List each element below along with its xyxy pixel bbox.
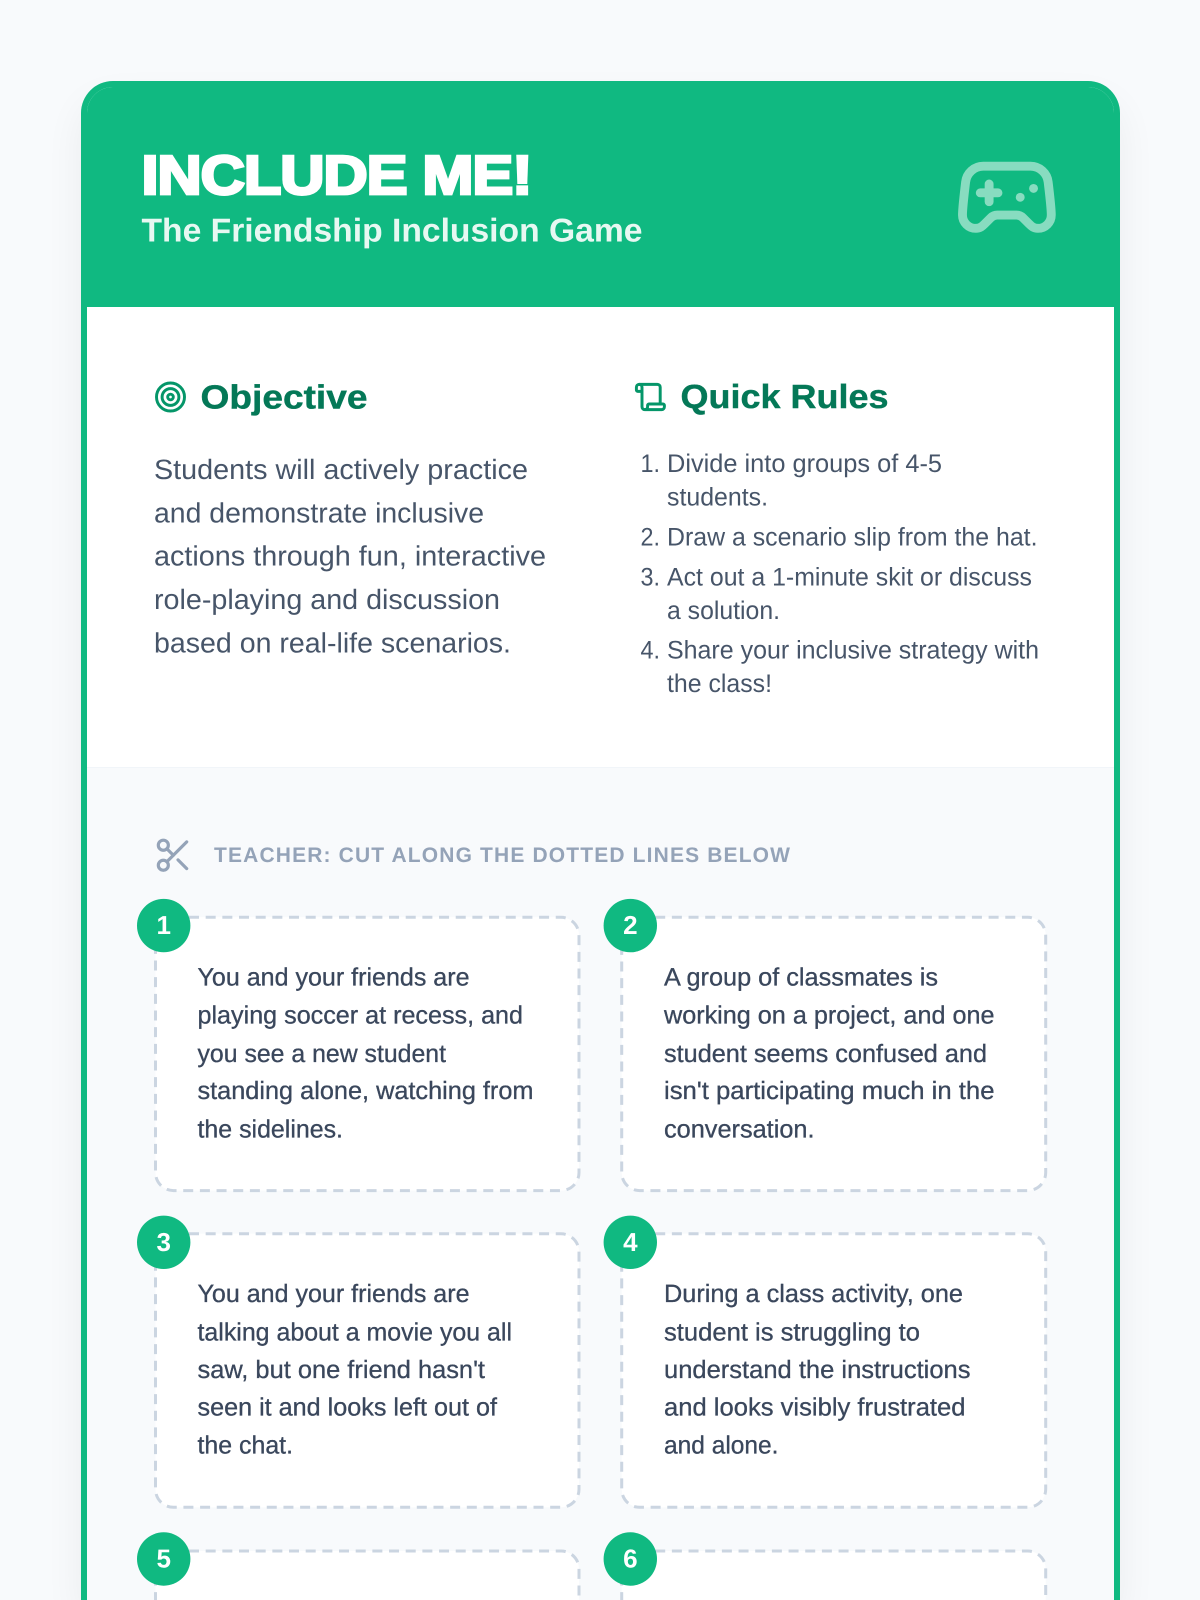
scenario slip 5 [137,1532,579,1600]
slip 3 text: seen it and looks left out of [198,1394,497,1422]
slip 2 text: conversation. [664,1115,814,1143]
numbered rules list: Divide into groups of 4-5 [667,450,942,478]
scenario slip 2 [604,899,1046,1191]
scenario slip 6: 6 [623,1544,638,1574]
slip 4 text: During a class activity, one [664,1280,963,1308]
numbered rules list: 4. [640,636,660,664]
heading: quick rules: Quick Rules [680,379,888,416]
subtitle: The Friendship Inclusion Game [142,212,642,248]
slip 4 text: understand the instructions [664,1356,970,1384]
objective text block: role-playing and discussion [154,584,500,615]
scenario slip 1: 1 [156,910,171,940]
numbered rules list: 2. [640,524,660,552]
slip 2 text: isn't participating much in the [664,1077,994,1105]
numbered rules list: the class! [667,670,772,698]
header banner [87,87,1114,307]
slip 2 text [663,963,994,1143]
icon: game controller [962,166,1051,228]
objective text block [154,454,546,658]
slip 1 text: you see a new student [198,1040,446,1068]
teacher cut instruction: TEACHER: CUT ALONG THE DOTTED LINES BELOW [214,844,790,867]
numbered rules list: Draw a scenario slip from the hat. [667,524,1038,552]
scenario slip 3 [137,1216,579,1507]
slip 4 text [664,1280,970,1460]
slip 2 text: A group of classmates is [664,963,938,991]
title: INCLUDE ME! [142,144,532,206]
icon: scroll [636,384,664,410]
slip 1 text [198,963,534,1143]
objective text block: based on real-life scenarios. [154,627,511,658]
slip 1 text: playing soccer at recess, and [198,1002,523,1030]
scenario slip 5: 5 [156,1544,171,1574]
panel: scenario slips [87,767,1114,1600]
slip 3 text: talking about a movie you all [198,1318,512,1346]
scenario slip 2: 2 [623,910,638,940]
slip 4 text: and looks visibly frustrated [664,1394,966,1422]
scenario slip 6 [604,1532,1046,1600]
slip 3 text: You and your friends are [198,1280,470,1308]
objective text block: and demonstrate inclusive [154,497,484,528]
slip 4 text: student is struggling to [664,1318,920,1346]
numbered rules list: students. [667,484,768,512]
icon: target [156,383,184,411]
slip 3 text: the chat. [198,1432,293,1460]
numbered rules list: Share your inclusive strategy with [667,636,1039,664]
numbered rules list: 1. [640,450,660,478]
scenario slip 4: 4 [623,1227,638,1257]
scenario slip 3: 3 [156,1227,171,1257]
slip 1 text: standing alone, watching from [198,1077,534,1105]
heading: objective: Objective [200,379,368,416]
objective text block: Students will actively practice [154,454,528,485]
slip 4 text: and alone. [664,1432,778,1460]
panel: objective and quick rules [87,307,1114,767]
numbered rules list: a solution. [667,597,780,625]
numbered rules list: 3. [640,564,660,592]
slip 2 text: working on a project, and one [663,1002,994,1030]
numbered rules list [640,450,1039,698]
slip 1 text: the sidelines. [198,1115,343,1143]
slip 3 text: saw, but one friend hasn't [198,1356,485,1384]
objective text block: actions through fun, interactive [154,541,546,572]
slip 2 text: student seems confused and [664,1040,987,1068]
scenario slip 4 [604,1216,1046,1507]
icon: scissors [158,840,187,870]
numbered rules list: Act out a 1-minute skit or discuss [667,564,1032,592]
slip 3 text [198,1280,512,1460]
slip 1 text: You and your friends are [198,963,470,991]
scenario slip 1 [137,899,579,1191]
